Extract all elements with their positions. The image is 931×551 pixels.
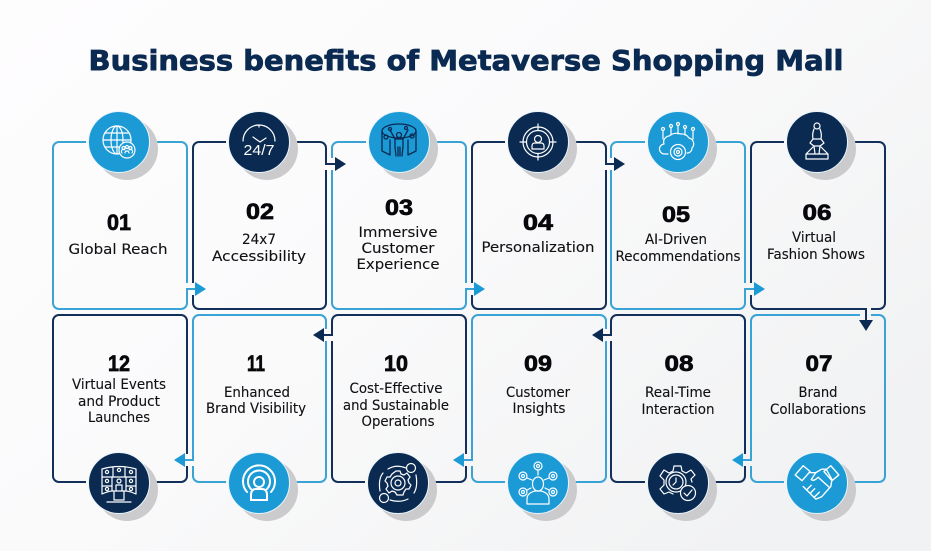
icon: AI brain and gear	[659, 122, 694, 160]
label: Collaborations	[770, 402, 866, 418]
icon: globe with people	[103, 126, 135, 158]
number 06: 06	[802, 200, 832, 225]
panel: 10 Cost-Effective and Sustainable Operations	[323, 315, 466, 521]
panel: 11 Enhanced Brand Visibility	[184, 315, 326, 521]
icon: virtual event screens	[102, 466, 136, 502]
number 04: 04	[523, 210, 554, 235]
label	[506, 385, 570, 417]
number 01: 01	[107, 210, 131, 235]
panel: 08 Real-Time Interaction	[602, 315, 745, 521]
panel: 12 Virtual Events and Product Launches	[53, 315, 187, 521]
icon: customer with data nodes	[519, 462, 557, 504]
number 11: 11	[247, 351, 265, 376]
panel: 09 Customer Insights	[463, 315, 606, 521]
arrow: 05 to 06	[754, 282, 765, 296]
label	[72, 377, 166, 426]
label: Enhanced	[224, 385, 290, 401]
panel: 07 Brand Collaborations	[742, 315, 885, 521]
icon: target person	[520, 124, 556, 160]
panel: 03 Immersive Customer Experience	[332, 112, 476, 309]
arrow: 01 to 02	[195, 282, 206, 296]
label	[212, 232, 306, 265]
label: Operations	[362, 414, 434, 430]
label: Launches	[88, 410, 150, 426]
number 08: 08	[664, 351, 694, 376]
icon: gear, clock and check	[660, 466, 696, 500]
icon: handshake	[795, 466, 839, 499]
panel: 01 Global Reach	[53, 112, 197, 309]
arrow: 10 to 11	[313, 328, 324, 342]
panel: 05 AI-Driven Recommendations	[611, 112, 755, 309]
number 12: 12	[108, 351, 130, 376]
icon: mannequin on podium	[806, 123, 828, 159]
icon: immersive room	[382, 124, 416, 156]
icon: 24/7 clock	[243, 125, 275, 159]
label: Insights	[512, 401, 566, 417]
panel: 06 Virtual Fashion Shows	[751, 112, 885, 322]
icon: visibility rings	[243, 465, 275, 500]
number 02: 02	[246, 199, 274, 224]
icon: gear with cost cycle	[379, 464, 417, 502]
label: Customer	[362, 241, 435, 257]
arrow: 06 to 07	[859, 320, 873, 331]
number 07: 07	[806, 351, 832, 376]
label	[206, 385, 306, 417]
panel: 04 Personalization	[472, 112, 616, 309]
arrow: 08 to 09	[592, 328, 603, 342]
label: Fashion Shows	[767, 247, 865, 263]
panel: 02 24x7 Accessibility	[193, 112, 337, 309]
title: Business benefits of Metaverse Shopping Mall	[88, 45, 843, 77]
label: Global Reach	[68, 242, 168, 258]
label: Recommendations	[616, 249, 740, 265]
label: Experience	[356, 257, 440, 273]
label: AI-Driven	[645, 232, 707, 248]
label: Immersive	[358, 225, 438, 241]
arrow: 07 to 08	[732, 453, 743, 467]
number 03: 03	[385, 195, 413, 220]
label: Accessibility	[212, 249, 306, 265]
label: Brand	[798, 385, 838, 401]
icon: 24/7 clock: 24/7	[244, 142, 274, 159]
label	[616, 232, 740, 265]
label	[343, 381, 449, 430]
arrow: 09 to 10	[453, 453, 464, 467]
arrow: 11 to 12	[174, 453, 185, 467]
label: Customer	[506, 385, 570, 401]
arrow: 04 to 05	[614, 157, 625, 171]
label: Personalization	[482, 240, 594, 256]
label: Interaction	[642, 402, 714, 418]
arrow: 03 to 04	[474, 282, 485, 296]
label	[642, 385, 714, 418]
number 10: 10	[384, 351, 408, 376]
label: Virtual Events	[72, 377, 166, 393]
label: Real-Time	[645, 385, 711, 401]
label: Brand Visibility	[206, 401, 306, 417]
number 05: 05	[662, 202, 690, 227]
label: and Product	[78, 394, 161, 410]
number 09: 09	[524, 351, 552, 376]
label: Virtual	[792, 230, 836, 246]
label	[356, 225, 440, 273]
label: and Sustainable	[343, 398, 449, 414]
arrow: 02 to 03	[335, 157, 346, 171]
label: Cost-Effective	[350, 381, 442, 397]
label	[770, 385, 866, 418]
label: 24x7	[242, 232, 276, 248]
label	[767, 230, 865, 263]
